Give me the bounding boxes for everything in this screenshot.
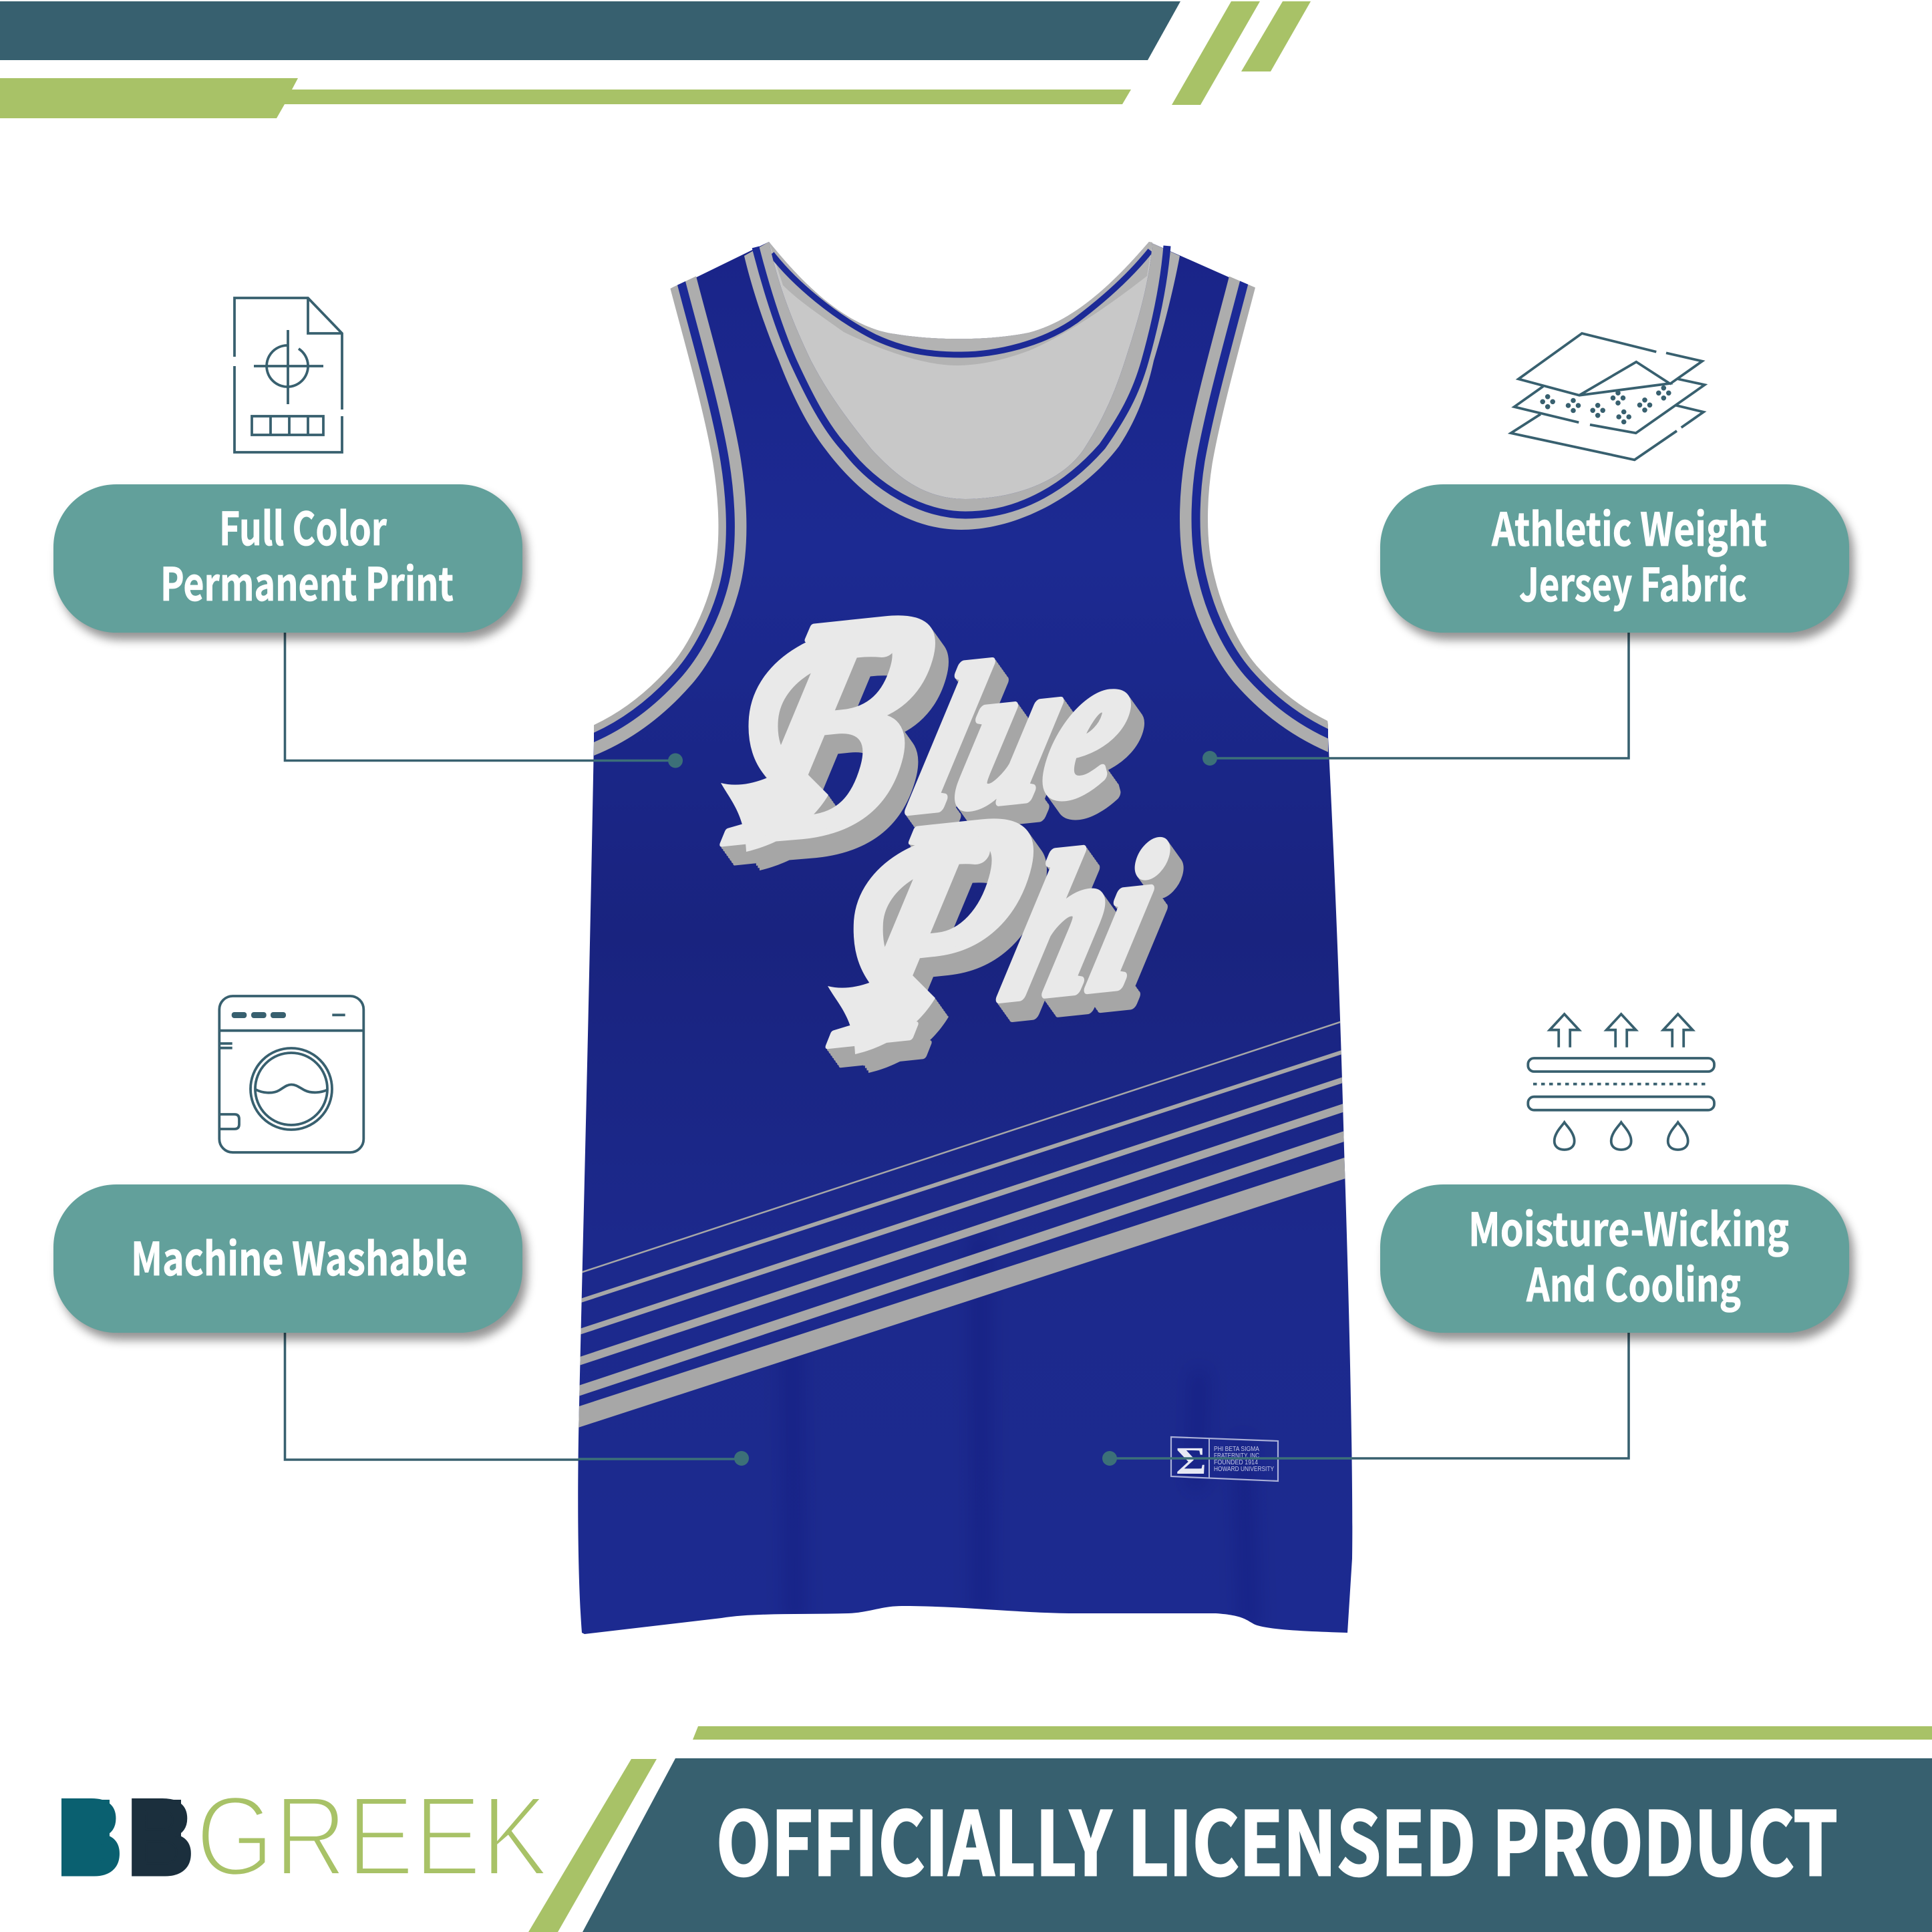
leader: athletic fabric xyxy=(1202,633,1629,766)
neck label tag xyxy=(1171,1437,1278,1482)
leader: full color print xyxy=(285,633,683,768)
diagonal stripes xyxy=(575,1017,1356,1418)
panel: athletic weight: Athletic Weight xyxy=(1491,493,1767,559)
letter flourishes xyxy=(763,642,975,977)
back collar xyxy=(769,242,1152,365)
panel: full color print xyxy=(53,484,522,633)
neck label tag: Σ xyxy=(1176,1439,1206,1482)
letter tails xyxy=(721,762,935,1054)
jersey script: Blue Phi xyxy=(701,513,1204,1117)
top banner stripes xyxy=(0,1,1311,118)
panel: machine washable xyxy=(53,1184,522,1333)
icon: print file with target xyxy=(234,298,342,452)
jersey script: Blue Phi: P xyxy=(804,739,1068,1117)
neck label tag: FRATERNITY, INC xyxy=(1214,1452,1259,1460)
jersey body xyxy=(578,242,1352,1634)
panel: full color print: Full Color xyxy=(219,492,387,558)
panel: moisture wicking xyxy=(1380,1184,1849,1333)
logo: BB Greek xyxy=(56,1773,548,1900)
jersey script: Blue Phi: B xyxy=(701,535,975,915)
footer banner xyxy=(528,1726,1932,1932)
icon: washing machine xyxy=(219,996,363,1152)
inner back of jersey xyxy=(769,242,1152,499)
fabric folds xyxy=(792,1236,1249,1630)
neck label tag: HOWARD UNIVERSITY xyxy=(1214,1466,1274,1473)
panel: machine washable: Machine Washable xyxy=(131,1223,468,1289)
neck label tag: PHI BETA SIGMA xyxy=(1214,1446,1259,1453)
logo: BB Greek: B xyxy=(56,1776,123,1899)
panel: athletic weight: Jersey Fabric xyxy=(1519,548,1747,615)
jersey xyxy=(575,242,1356,1634)
front collar xyxy=(744,242,1180,530)
armhole trims xyxy=(586,254,1338,743)
panel: full color print: Permanent Print xyxy=(160,548,454,614)
jersey script: Blue Phi: hi xyxy=(985,801,1182,1042)
logo: BB Greek: B xyxy=(126,1776,194,1899)
panel: athletic weight xyxy=(1380,484,1849,633)
icon: fabric layers xyxy=(1511,333,1705,460)
panel: moisture wicking: Moisture-Wicking xyxy=(1468,1193,1789,1259)
neck label tag: FOUNDED 1914 xyxy=(1214,1459,1258,1466)
leader: machine washable xyxy=(285,1333,749,1466)
jersey script: Blue Phi: lue xyxy=(893,607,1159,854)
logo: BB Greek: GREEK xyxy=(196,1773,548,1900)
leader: moisture wicking xyxy=(1102,1333,1629,1466)
icon: moisture wicking xyxy=(1528,1014,1714,1150)
panel: moisture wicking: And Cooling xyxy=(1526,1249,1741,1315)
